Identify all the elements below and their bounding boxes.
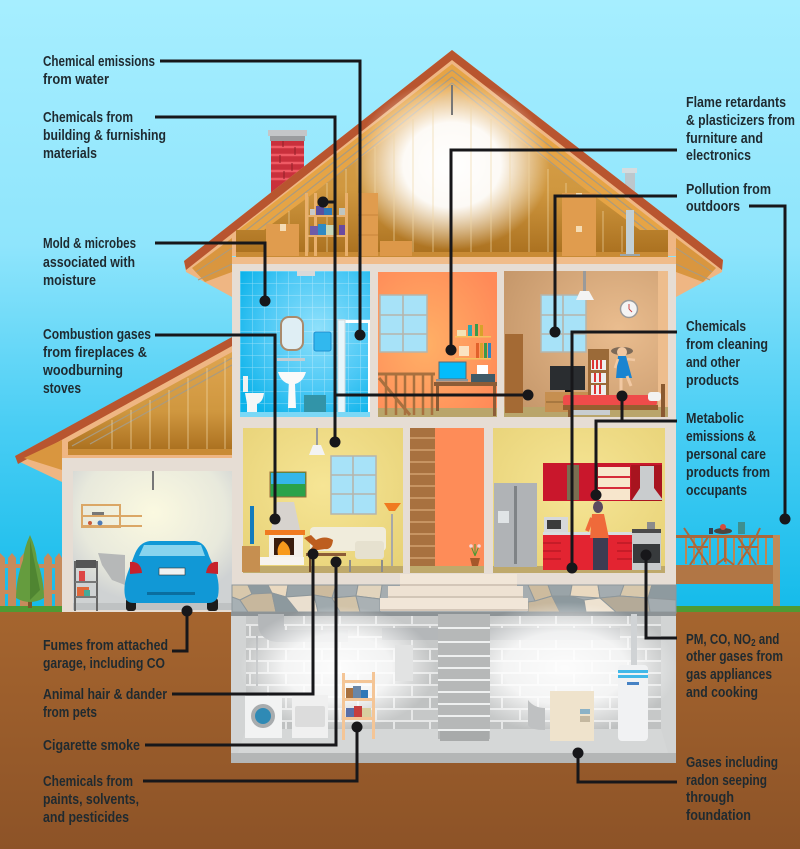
text: garage fumes: garage, including CO — [43, 656, 165, 672]
duct elbow — [528, 700, 545, 730]
line: gas appliances — [640, 550, 677, 638]
text: metabolic emissions: personal care — [686, 447, 766, 463]
lower cabinets — [543, 532, 632, 570]
labels: right column — [686, 95, 795, 824]
line: chemicals from cleaning — [566, 332, 677, 574]
water heater — [618, 614, 648, 741]
desk — [434, 382, 497, 416]
electrical panel — [395, 645, 413, 681]
tv — [550, 366, 585, 392]
dryer — [292, 695, 328, 738]
text: cleaning products — [686, 319, 768, 389]
text: paints and solvents — [43, 774, 139, 826]
tree — [16, 535, 44, 608]
room: kitchen — [493, 428, 665, 573]
text: mold and microbes: moisture — [43, 273, 96, 289]
washing machine — [245, 696, 282, 738]
fridge — [494, 483, 537, 567]
laptop — [436, 362, 468, 382]
window — [541, 295, 586, 352]
text: radon gases: foundation — [686, 808, 751, 824]
line: chemical emissions from water — [160, 61, 366, 340]
main house attic and roof — [184, 50, 723, 297]
text: cleaning products: and other — [686, 355, 740, 371]
fence — [0, 553, 62, 606]
text: mold and microbes: Mold & microbes — [43, 236, 136, 252]
wall clock — [620, 300, 638, 318]
text: metabolic emissions: emissions & — [686, 429, 756, 445]
line: chemicals from building and furnishing materials — [155, 117, 534, 448]
text: radon gases: Gases including — [686, 755, 778, 771]
text: pollution from outdoors: outdoors — [686, 199, 740, 215]
room: bathroom — [240, 271, 370, 417]
text: gas appliances: and cooking — [686, 685, 758, 701]
text: flame retardants: Flame retardants — [686, 95, 786, 111]
stone foundation band — [232, 585, 676, 613]
person cooking — [587, 501, 609, 570]
front steps — [380, 574, 528, 611]
text: cleaning products: products — [686, 373, 739, 389]
text: mold and microbes: associated with — [43, 255, 135, 271]
text: metabolic emissions: occupants — [686, 483, 747, 499]
ducts — [256, 614, 620, 686]
line: radon gases — [572, 748, 677, 782]
oven — [632, 529, 661, 570]
window — [331, 456, 376, 514]
mirror — [281, 317, 303, 350]
sofa — [310, 527, 386, 572]
towel — [314, 332, 331, 351]
chimney — [268, 130, 307, 196]
text: combustion gases: from fireplaces & — [43, 345, 147, 361]
bookshelf — [588, 349, 609, 395]
text: flame retardants: furniture and — [686, 131, 763, 147]
text: pollution from outdoors: Pollution from — [686, 182, 771, 198]
text: gas appliances: gas appliances — [686, 667, 772, 683]
vent pipe above roof — [622, 168, 637, 202]
line: animal hair — [172, 548, 318, 694]
text: combustion gases: stoves — [43, 381, 81, 397]
furnace — [550, 691, 594, 741]
line: paints and solvents — [143, 722, 362, 781]
text: gas appliances: PM, CO, NO — [686, 631, 751, 647]
text: mold and microbes — [43, 236, 136, 289]
laundry basket — [304, 395, 326, 413]
room: office — [378, 272, 497, 417]
printer — [471, 365, 495, 382]
text: animal hair: Animal hair & dander — [43, 687, 167, 703]
fireplace — [260, 502, 305, 565]
labels: left column — [42, 54, 168, 826]
text: combustion gases: Combustion gases — [43, 327, 151, 343]
sink — [277, 358, 306, 408]
basement — [231, 602, 677, 763]
bed — [563, 384, 665, 417]
staircase and hall — [410, 428, 484, 573]
garage — [62, 458, 234, 612]
text: chemicals from building: building & furnishing — [43, 128, 166, 144]
line: metabolic emissions — [590, 390, 677, 500]
line: pollution outdoors — [749, 206, 790, 524]
line: cigarette smoke — [145, 556, 342, 745]
pendant lamp — [309, 428, 325, 455]
stair railing — [378, 374, 435, 415]
line: pollution indoors — [550, 196, 677, 338]
callout lines and dots — [143, 61, 790, 782]
window — [380, 295, 427, 352]
shower — [338, 320, 370, 416]
garage metal rack — [75, 560, 97, 611]
picture — [270, 472, 306, 497]
text: flame retardants: electronics — [686, 148, 751, 164]
text: gas appliances: 2 — [751, 637, 756, 648]
girl jumping — [611, 347, 635, 392]
microwave — [544, 517, 568, 532]
ground soil — [0, 606, 800, 849]
text: metabolic emissions — [686, 411, 770, 499]
room: living room — [242, 428, 403, 573]
text: chemicals from building: Chemicals from — [43, 110, 133, 126]
text: pollution from outdoors — [686, 182, 771, 215]
text: chemical emissions from water: Chemical emissions — [43, 54, 155, 70]
text: paints and solvents: Chemicals from — [43, 774, 133, 790]
text: cleaning products: from cleaning — [686, 337, 768, 353]
potted plant — [469, 544, 481, 566]
deck chairs and table — [684, 528, 760, 565]
dresser — [545, 392, 589, 412]
text: gas appliances: and — [756, 631, 779, 647]
text: flame retardants — [686, 95, 795, 164]
ceiling lamp — [576, 271, 594, 300]
text: chemical emissions from water: from water — [43, 72, 109, 88]
house walls — [232, 264, 676, 585]
sky background — [0, 0, 800, 612]
wall shelves and books — [455, 324, 491, 360]
text: radon gases — [686, 755, 778, 824]
text: metabolic emissions: products from — [686, 465, 770, 481]
text: cigarette smoke: Cigarette smoke — [43, 738, 140, 754]
toilet — [243, 376, 264, 413]
deck — [676, 522, 780, 606]
upper cabinets — [543, 463, 662, 501]
text: radon gases: through — [686, 790, 734, 806]
text: chemicals from building: materials — [43, 146, 97, 162]
text: radon gases: radon seeping — [686, 773, 767, 789]
range hood — [632, 466, 663, 500]
line: combustion gases — [155, 335, 280, 524]
garage roof and attic — [15, 337, 232, 482]
coffee table — [306, 553, 346, 572]
line: mold and microbes — [155, 243, 270, 306]
line: garage fumes — [172, 606, 192, 651]
basement stairs — [438, 614, 490, 741]
tv — [250, 506, 254, 544]
text: gas appliances — [686, 631, 783, 701]
text: garage fumes — [43, 638, 168, 672]
text: combustion gases: woodburning — [42, 363, 123, 379]
room: bedroom — [504, 271, 668, 417]
text: metabolic emissions: Metabolic — [686, 411, 744, 427]
text: animal hair: from pets — [43, 705, 97, 721]
cat — [304, 535, 333, 550]
text: paints and solvents: paints, solvents, — [43, 792, 139, 808]
line: flame retardants — [446, 150, 677, 356]
door — [505, 334, 523, 413]
garage wall shelf — [82, 505, 142, 527]
floor lamp — [384, 503, 401, 566]
side table — [242, 546, 260, 572]
text: chemicals from building — [43, 110, 166, 162]
car — [124, 541, 219, 611]
text: animal hair — [43, 687, 167, 721]
text: chemical emissions from water — [43, 54, 155, 88]
text: garage fumes: Fumes from attached — [43, 638, 168, 654]
text: cleaning products: Chemicals — [686, 319, 746, 335]
attic contents — [266, 193, 640, 256]
basement chemical shelf — [342, 672, 375, 740]
text: combustion gases — [42, 327, 151, 397]
text: paints and solvents: and pesticides — [43, 810, 129, 826]
